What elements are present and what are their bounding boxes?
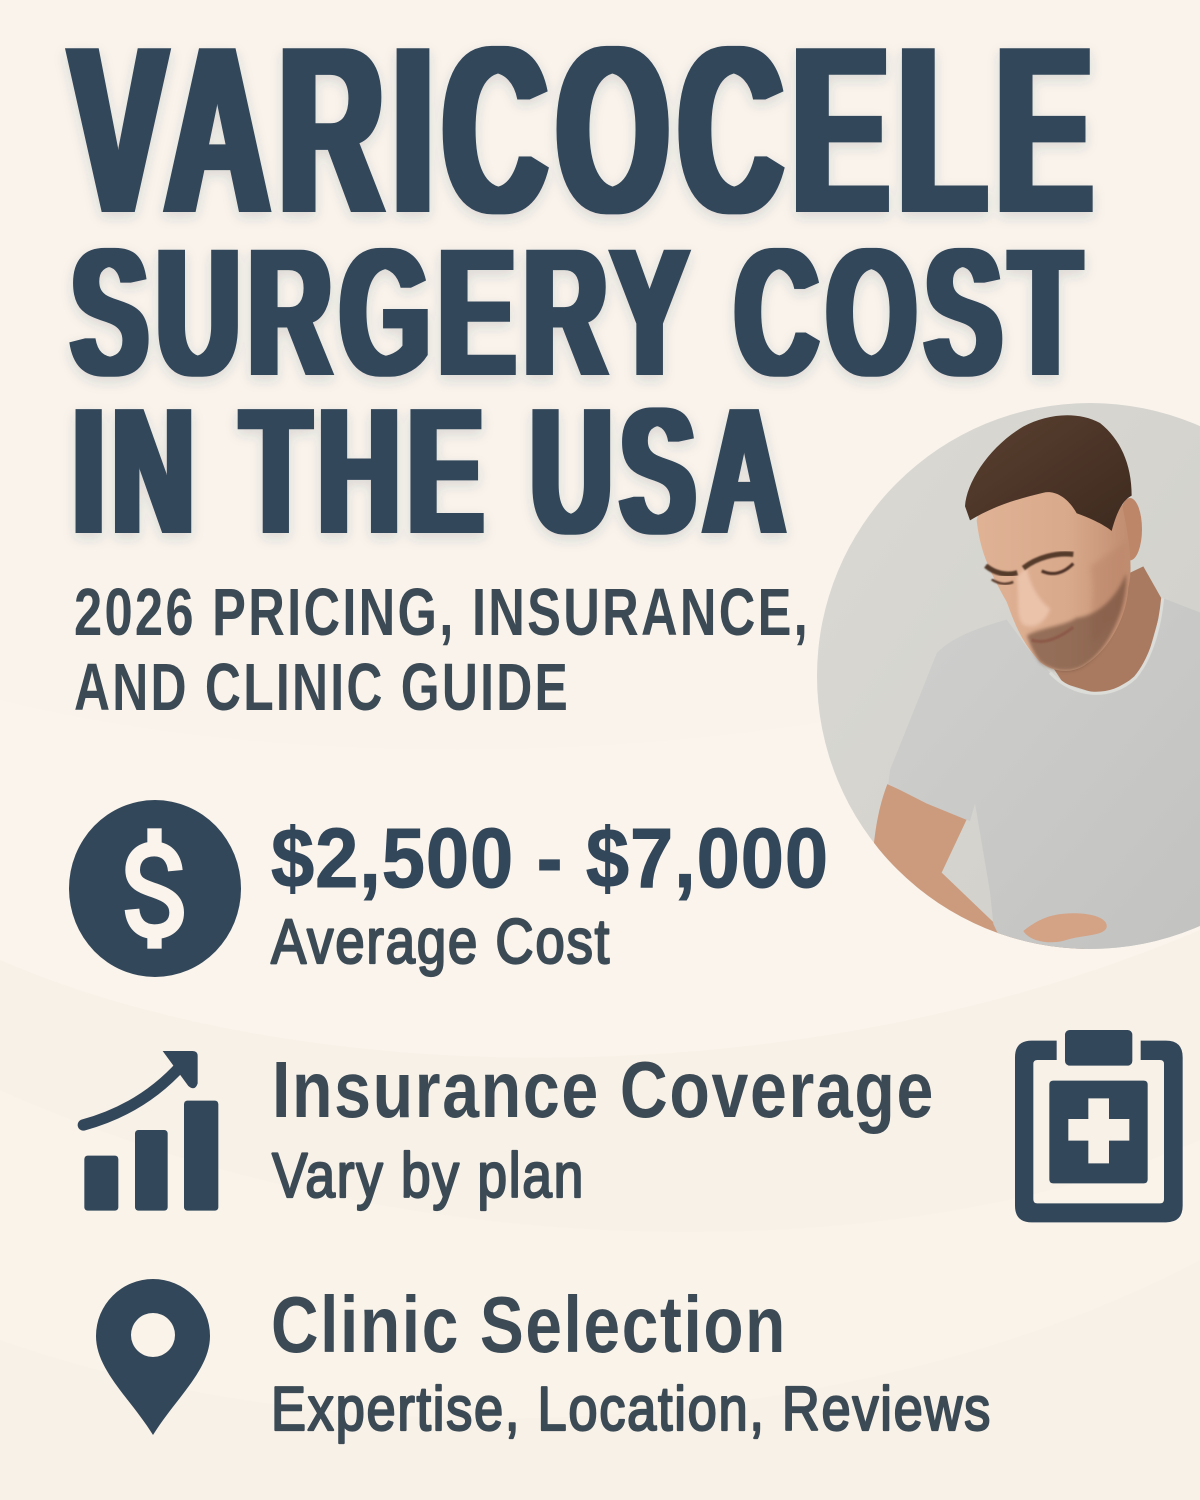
cheek shade (1092, 558, 1113, 611)
photo: man holding abdomen (810, 400, 1200, 959)
eye left (992, 579, 1013, 584)
mouth (1032, 627, 1073, 642)
hand (1023, 913, 1107, 942)
title (70, 0, 1102, 572)
insurance detail: Vary by plan (272, 1141, 585, 1211)
brow left (986, 566, 1017, 574)
cost figure: $2,500 - $7,000 (271, 811, 829, 905)
cost label: Average Cost (271, 907, 611, 977)
ear (1122, 498, 1142, 560)
collar (1050, 598, 1163, 693)
icon: medical clipboard (1015, 1030, 1183, 1222)
hair (965, 415, 1132, 531)
title line 3: IN THE USA (73, 371, 793, 572)
icon: rising bar chart (83, 1051, 218, 1211)
clinic detail: Expertise, Location, Reviews (271, 1375, 992, 1444)
face (976, 492, 1130, 671)
arm (874, 784, 1084, 949)
subtitle line 1: 2026 PRICING, INSURANCE, (74, 575, 810, 650)
clinic heading: Clinic Selection (271, 1280, 787, 1369)
icon: location pin (96, 1279, 210, 1435)
subtitle (74, 575, 810, 725)
subtitle line 2: AND CLINIC GUIDE (74, 650, 570, 725)
neck (1054, 566, 1162, 692)
shirt (888, 598, 1200, 959)
nose (1017, 566, 1050, 626)
brow right (1023, 554, 1073, 568)
beard (1027, 573, 1126, 671)
icon: dollar coin (69, 800, 241, 977)
insurance heading: Insurance Coverage (272, 1045, 935, 1134)
eye right (1042, 564, 1073, 574)
